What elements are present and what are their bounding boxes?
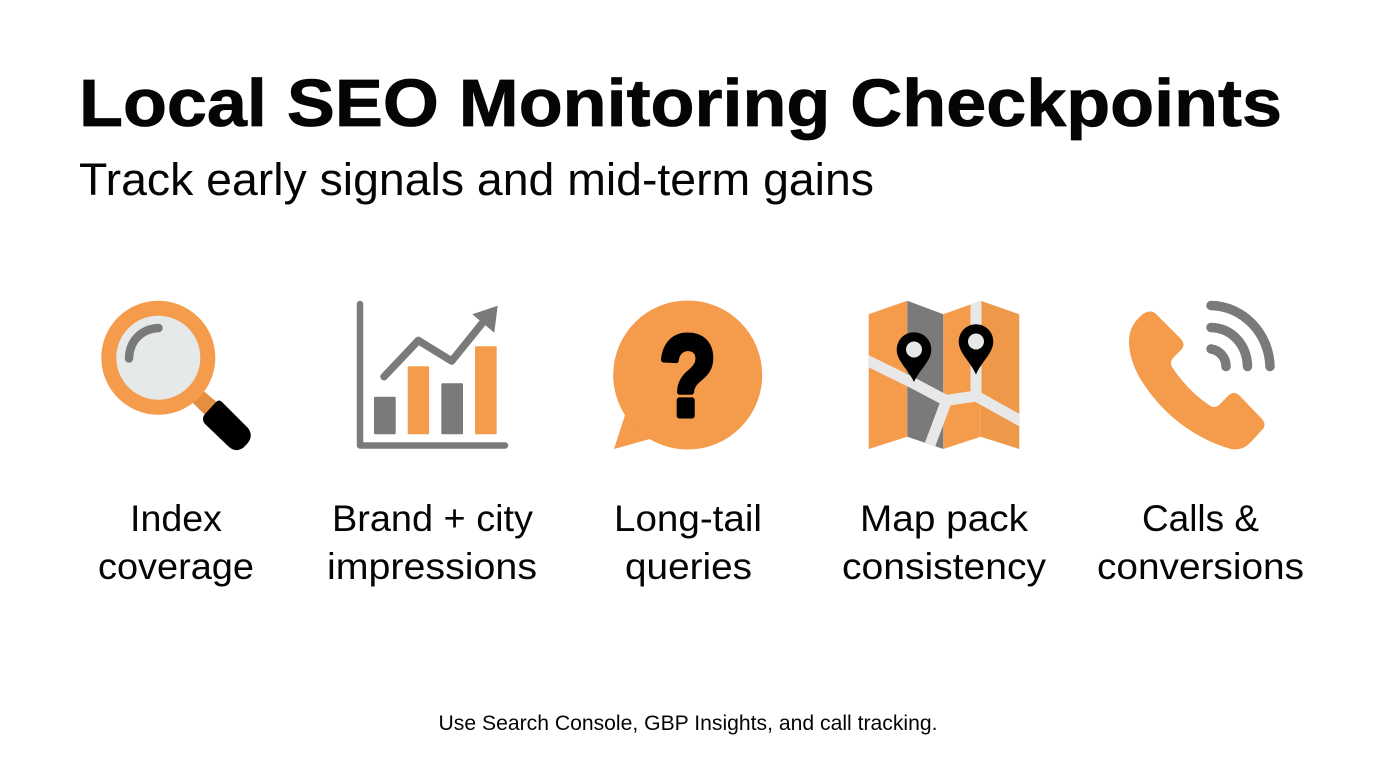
label: brand + city impressions: Brand + city [332, 497, 533, 539]
icon: folded map with two pins [868, 300, 1020, 449]
icon: speech bubble with question mark: ? [659, 314, 716, 441]
label: brand + city impressions [327, 497, 537, 587]
icon: magnifying glass [109, 308, 251, 450]
label: calls and conversions [1097, 497, 1304, 587]
label: index coverage: coverage [98, 545, 254, 587]
subtitle: Track early signals and mid-term gains [79, 154, 874, 205]
icon: speech bubble with question mark [613, 300, 762, 450]
label: brand + city impressions: impressions [327, 545, 537, 587]
checkpoint: index coverage [98, 308, 254, 587]
title: Local SEO Monitoring Checkpoints [79, 66, 1282, 141]
label: index coverage: Index [130, 497, 222, 539]
checkpoint: calls and conversions [1097, 306, 1304, 587]
checkpoint: brand + city impressions [327, 304, 537, 587]
label: map pack consistency: Map pack [860, 497, 1028, 539]
checkpoint: map pack consistency [842, 296, 1046, 587]
icon: bar chart with rising arrow [360, 304, 505, 446]
checkpoint: long-tail queries [613, 300, 762, 587]
label: calls and conversions: Calls & [1142, 497, 1259, 539]
label: long-tail queries [614, 497, 762, 587]
footer note: Use Search Console, GBP Insights, and call tracking. [438, 712, 938, 735]
icon: phone with signal arcs [1129, 306, 1270, 449]
label: map pack consistency [842, 497, 1046, 587]
label: long-tail queries: Long-tail [614, 497, 762, 539]
label: calls and conversions: conversions [1097, 545, 1304, 587]
label: map pack consistency: consistency [842, 545, 1046, 587]
label: long-tail queries: queries [625, 545, 752, 587]
label: index coverage [98, 497, 254, 587]
